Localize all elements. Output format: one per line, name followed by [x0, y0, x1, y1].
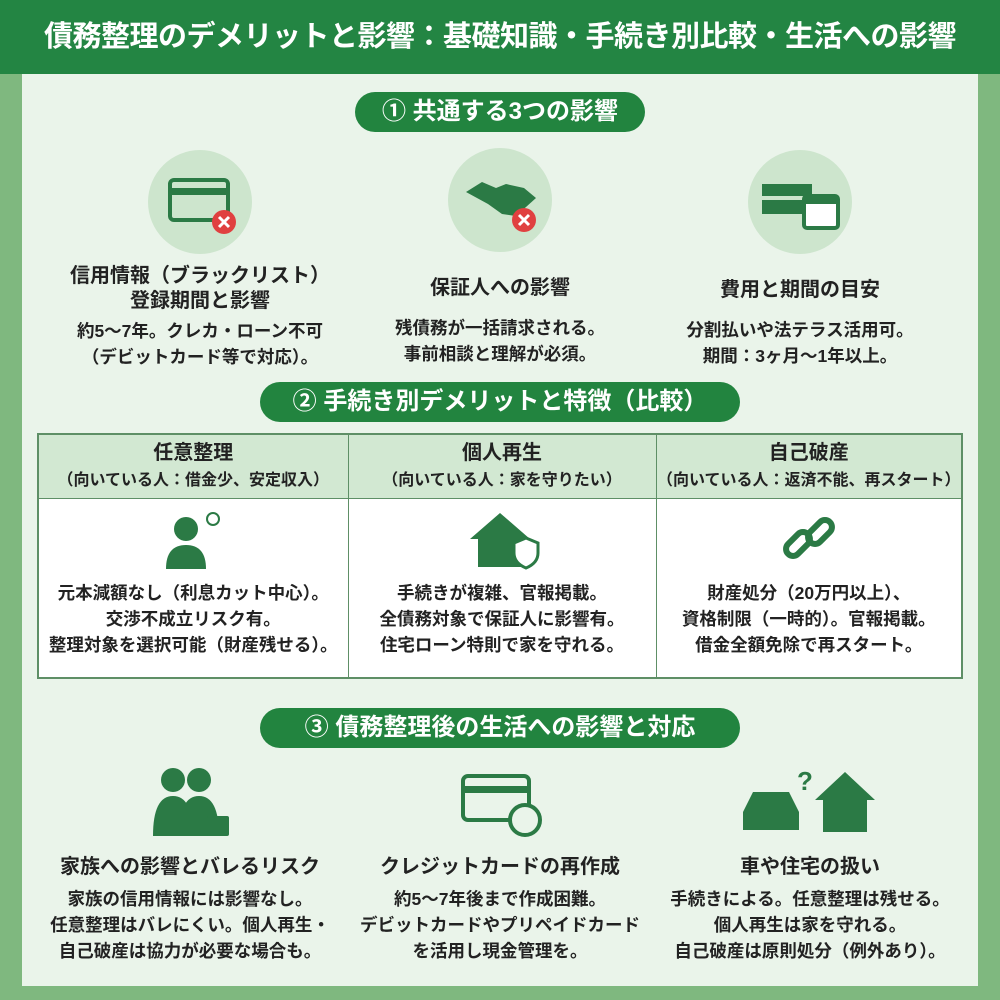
section 1 heading: ① 共通する3つの影響	[382, 98, 618, 125]
item: guarantor: 残債務が一括請求される。	[395, 318, 605, 338]
comparison table	[37, 433, 963, 679]
icon: money calendar	[748, 150, 852, 254]
section 2 heading	[260, 382, 740, 422]
comparison table: 住宅ローン特則で家を守れる。	[380, 634, 624, 654]
item: credit info: （デビットカード等で対応）。	[82, 347, 318, 367]
item: credit info	[70, 150, 330, 367]
item: cost	[686, 150, 914, 366]
comparison table: 個人再生	[462, 442, 542, 464]
comparison table: 交渉不成立リスク有。	[106, 608, 281, 628]
icon: handshake	[448, 148, 552, 252]
item: family: 任意整理はバレにくい。個人再生・	[50, 915, 330, 935]
comparison table: 元本減額なし（利息カット中心）。	[58, 582, 329, 602]
header: 債務整理のデメリットと影響：基礎知識・手続き別比較・生活への影響	[44, 21, 956, 53]
item: credit card	[360, 774, 640, 961]
item: car house: 手続きによる。任意整理は残せる。	[670, 889, 950, 909]
icon: card clock	[461, 774, 542, 837]
item: family: 家族への影響とバレるリスク	[60, 856, 320, 878]
item: family: 自己破産は協力が必要な場合も。	[59, 941, 321, 961]
item: credit info: 約5〜7年。クレカ・ローン不可	[77, 321, 323, 341]
item: cost: 分割払いや法テラス活用可。	[686, 320, 914, 340]
header	[0, 0, 1000, 74]
item: credit card: クレジットカードの再作成	[380, 856, 620, 878]
comparison table: 借金全額免除で再スタート。	[695, 634, 922, 654]
comparison table: 任意整理	[153, 442, 233, 464]
comparison table: （向いている人：返済不能、再スタート）	[657, 472, 961, 489]
section 1 heading	[355, 92, 645, 132]
item: credit info: 登録期間と影響	[130, 290, 270, 312]
comparison table: 財産処分（20万円以上）、	[707, 582, 910, 602]
comparison table: 整理対象を選択可能（財産残せる）。	[49, 634, 338, 654]
section 3 heading: ③ 債務整理後の生活への影響と対応	[305, 714, 695, 741]
icon: card with x	[148, 150, 252, 254]
item: car house: 自己破産は原則処分（例外あり）。	[674, 941, 946, 961]
item: credit card: を活用し現金管理を。	[412, 941, 588, 961]
item: guarantor: 保証人への影響	[430, 277, 570, 299]
icon: car and house: ?	[797, 766, 813, 796]
comparison table: （向いている人：借金少、安定収入）	[57, 472, 329, 489]
comparison table: 自己破産	[769, 442, 849, 464]
item: family: 家族の信用情報には影響なし。	[68, 889, 312, 909]
comparison table: 手続きが複雑、官報掲載。	[397, 582, 607, 602]
section 2 heading: ② 手続き別デメリットと特徴（比較）	[293, 388, 707, 415]
item: guarantor: 事前相談と理解が必須。	[404, 344, 596, 364]
item: credit card: 約5〜7年後まで作成困難。	[394, 889, 606, 909]
comparison table: （向いている人：家を守りたい）	[382, 472, 622, 489]
item: family	[50, 768, 330, 961]
item: guarantor	[395, 148, 605, 364]
item: car house: 車や住宅の扱い	[740, 856, 880, 878]
item: credit card: デビットカードやプリペイドカード	[360, 915, 640, 935]
item: cost: 費用と期間の目安	[720, 279, 880, 301]
icon: family lock	[153, 768, 229, 836]
comparison table: 全債務対象で保証人に影響有。	[380, 608, 624, 628]
item: car house	[670, 766, 950, 961]
icon: car and house	[743, 766, 875, 832]
section 3 heading	[260, 708, 740, 748]
item: credit info: 信用情報（ブラックリスト）	[70, 265, 330, 287]
comparison table: 資格制限（一時的）。官報掲載。	[682, 608, 936, 628]
item: cost: 期間：3ヶ月〜1年以上。	[703, 346, 897, 366]
item: car house: 個人再生は家を守れる。	[714, 915, 906, 935]
